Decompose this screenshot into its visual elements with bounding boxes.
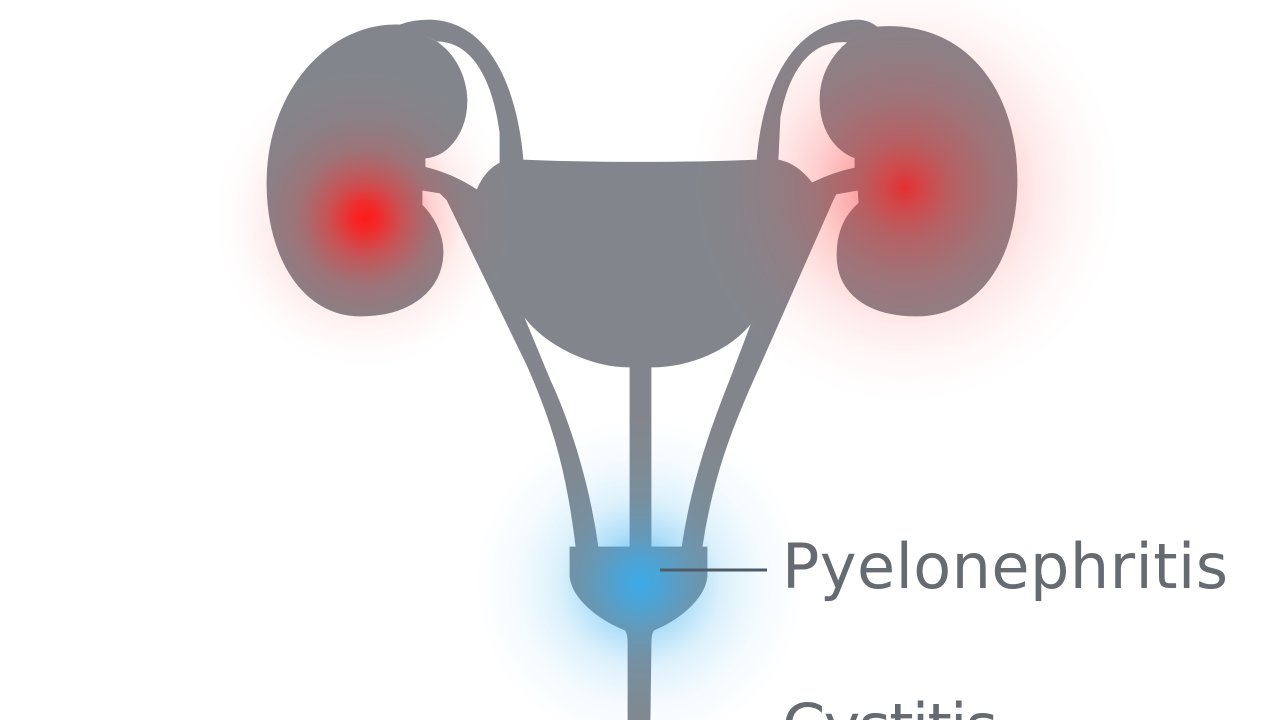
right kidney xyxy=(820,27,1017,316)
left kidney xyxy=(267,25,467,316)
label: Pyelonephritis: Pyelonephritis xyxy=(782,530,1228,603)
leader line xyxy=(660,568,767,572)
red glow: left kidney xyxy=(215,68,515,368)
urinary tract silhouette xyxy=(267,20,1017,720)
blue glow: bladder outlet xyxy=(475,418,805,720)
bladder, ureters and urethra xyxy=(400,20,877,720)
red glow: right kidney xyxy=(690,0,1120,403)
